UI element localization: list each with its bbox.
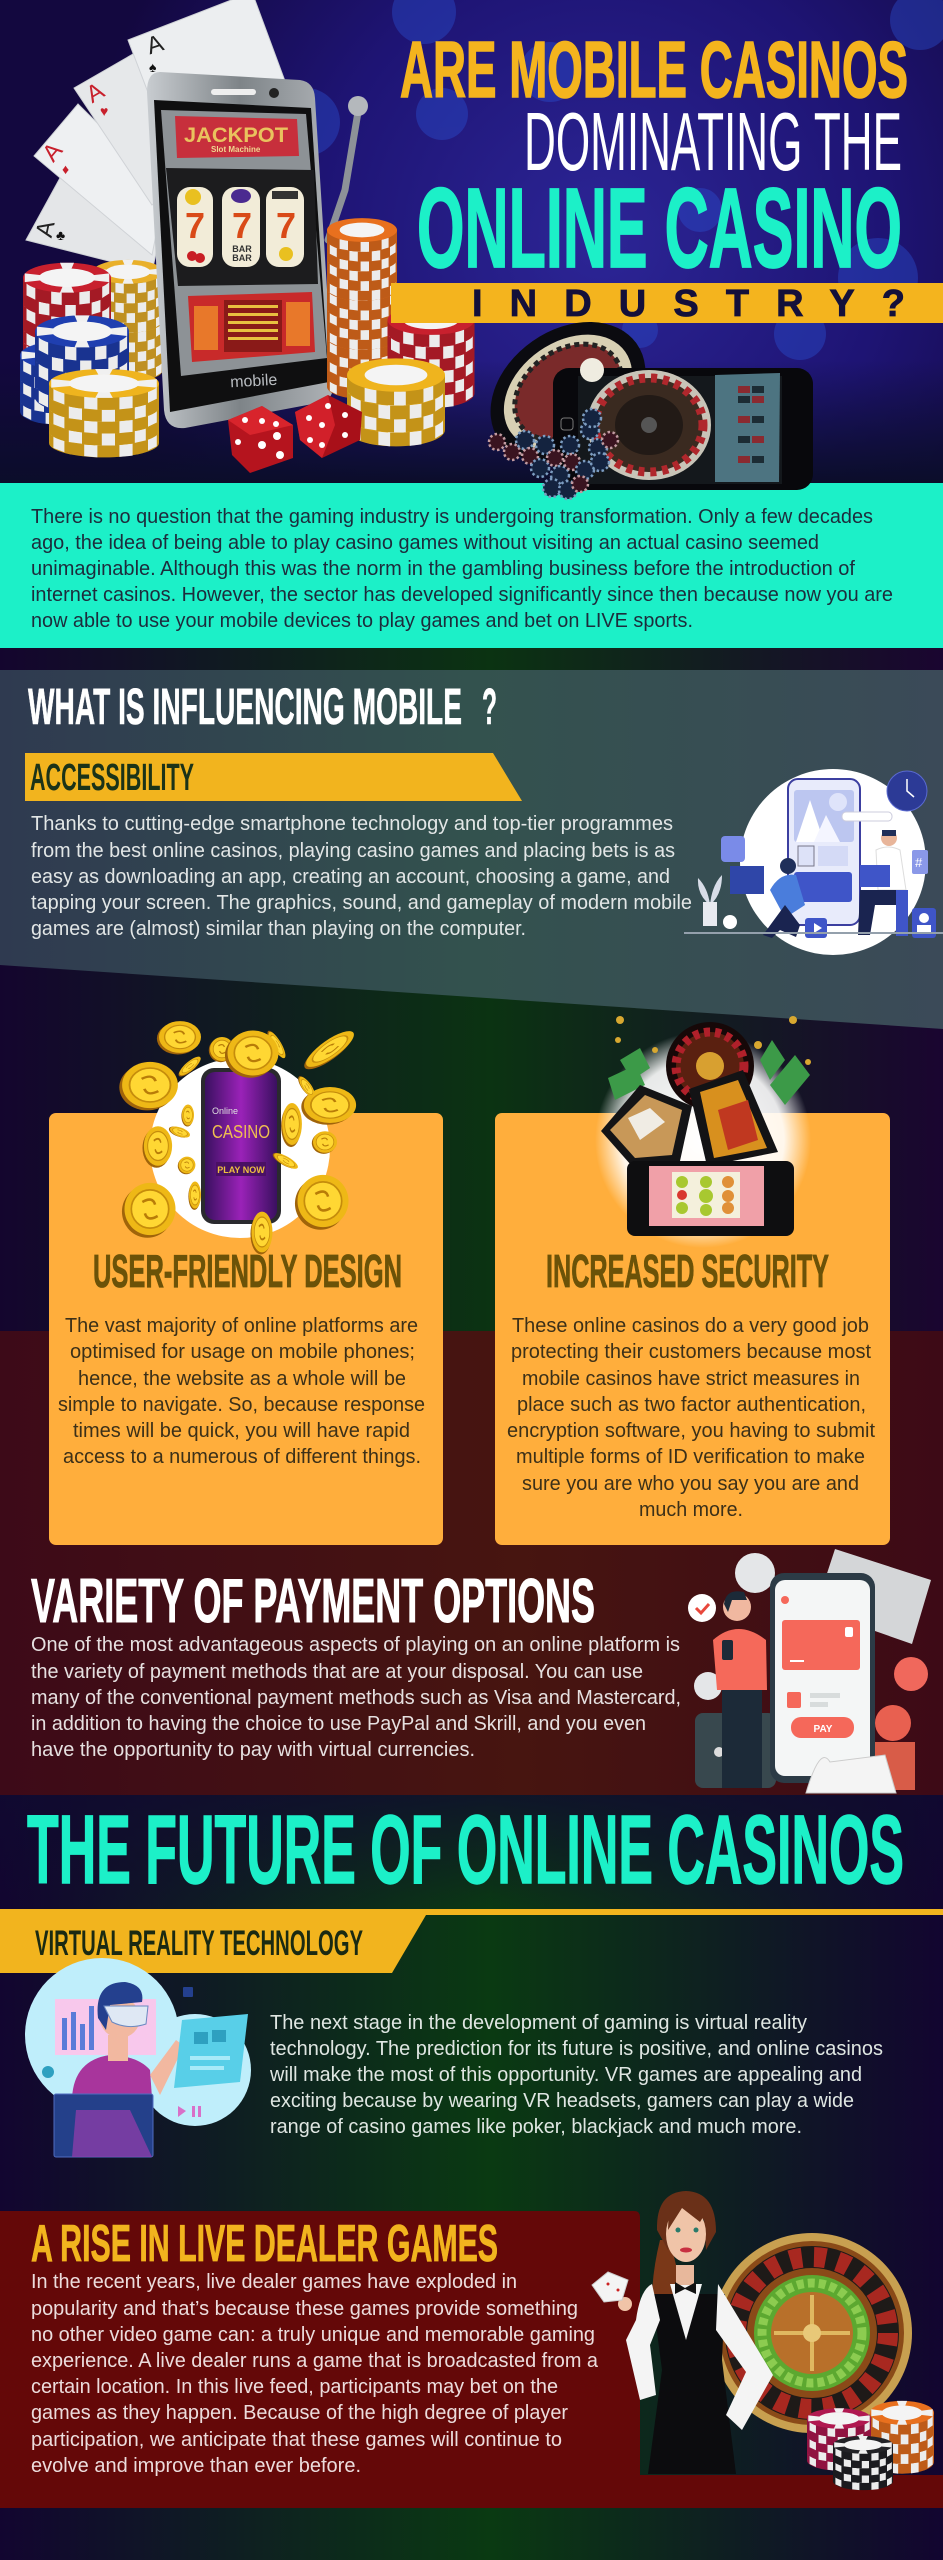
text block: live dealer: certain location. In this live feed, participants may bet on the [31, 2376, 558, 2398]
heading: user-friendly design: USER-FRIENDLY DESIGN [93, 1245, 402, 1297]
text block: payment options: have the opportunity to pay with virtual currencies. [31, 1739, 475, 1761]
icon: playing cards fan: A [37, 137, 68, 167]
icon: slot machine phone: Slot Machine [211, 145, 261, 154]
person [688, 1591, 767, 1788]
section: variety of payment options [31, 1549, 931, 1793]
icon: playing cards fan: ♣ [56, 227, 65, 243]
panel: a rise in live dealer games [0, 2211, 943, 2508]
ribbon: virtual reality technology [0, 1909, 943, 1973]
text block: virtual reality [269, 2012, 883, 2138]
panel: maroon band [0, 1331, 943, 1795]
icon: chip stacks behind the phone [23, 260, 163, 416]
text block: user-friendly design: hence, the website as a whole will be [78, 1368, 406, 1390]
icon: playing cards fan: A [31, 218, 61, 240]
text block: user-friendly design: access to a numerous of different things. [63, 1446, 421, 1468]
text block: virtual reality: exciting because by wearing VR headsets, gamers can play a wide [270, 2090, 854, 2112]
text block: increased security: protecting their customers because most [511, 1341, 871, 1363]
text block: virtual reality: technology. The prediction for its future is positive, and online casinos [270, 2038, 883, 2060]
text block: intro: now able to use your mobile devices to play games and bet on LIVE sports. [31, 610, 693, 632]
text block: accessibility: easy as downloading an app, creating an account, choosing a game, and [31, 866, 670, 888]
text block: intro: unimaginable. Although this was the norm in the gambling business before the introduction of [31, 558, 855, 580]
person right [858, 830, 908, 936]
icon: slot machine phone: 7 [185, 205, 205, 246]
text block: virtual reality: The next stage in the development of gaming is virtual reality [270, 2012, 807, 2034]
icon: slot machine phone: BAR [232, 244, 252, 254]
heading: what is influencing mobile [28, 678, 497, 735]
icon: playing cards fan: A [143, 30, 167, 60]
text block: increased security: These online casinos do a very good job [512, 1315, 869, 1337]
text block: accessibility [31, 813, 692, 940]
icon: app developers illustration: # [915, 855, 923, 870]
plant [698, 875, 737, 929]
panel: what is influencing mobile: ? [482, 678, 497, 735]
text block: user-friendly design: The vast majority of online platforms are [65, 1315, 418, 1337]
icon: casino phone with coins: Online [212, 1106, 238, 1116]
icon: playing cards fan: ♥ [100, 103, 108, 119]
text block: live dealer: games as they happen. Because of the high degree of player [31, 2402, 568, 2424]
ribbon: virtual reality technology: VIRTUAL REALITY TECHNOLOGY [35, 1924, 363, 1963]
icon: dealer chips [807, 2401, 934, 2490]
text block: intro [31, 506, 893, 632]
panel: what is influencing mobile [0, 670, 943, 1029]
text block: live dealer: participation, we anticipate that these games will continue to [31, 2429, 562, 2451]
text block: increased security: sure you are who you say you are and [522, 1473, 859, 1495]
text block: intro: internet casinos. However, the sector has developed significantly since then because now you are [31, 584, 893, 606]
icon: slot machine phone: mobile [230, 372, 278, 391]
text block: user-friendly design [58, 1315, 425, 1468]
text block: virtual reality: range of casino games like poker, blackjack and much more. [270, 2116, 802, 2138]
icon: casino phones and roulette [595, 1016, 811, 1248]
text block: intro: ago, the idea of being able to play casino games without visiting an actual casino seemed [31, 532, 819, 554]
person left [763, 858, 805, 938]
text block: increased security: place such as two factor authentication, [517, 1394, 866, 1416]
text block: live dealer: In the recent years, live dealer games have exploded in [31, 2271, 517, 2293]
icon: red dice [228, 395, 362, 473]
heading: what is influencing mobile: WHAT IS INFLUENCING MOBILE [28, 678, 462, 735]
icon: playing cards fan: ♠ [149, 59, 157, 75]
icon: roulette wheel and phone [464, 293, 813, 499]
hero banner [0, 0, 943, 483]
text block: live dealer: no other video game can: a truly unique and memorable gaming [31, 2324, 595, 2346]
icon: slot machine phone: BAR [232, 253, 252, 263]
icon: mobile payment illustration: PAY [814, 1724, 833, 1735]
text block: payment options [31, 1634, 681, 1761]
icon: slot machine phone: JACKPOT [184, 124, 288, 147]
text block: virtual reality: will make the most of this opportunity. VR games are appealing and [269, 2064, 862, 2086]
icon: app developers illustration [684, 769, 943, 955]
text block: increased security: mobile casinos have strict measures in [522, 1368, 860, 1390]
text block: user-friendly design: optimised for usage on mobile phones; [70, 1341, 415, 1363]
icon: playing cards fan: ♦ [62, 161, 69, 177]
text block: live dealer [31, 2271, 599, 2477]
text block: live dealer: evolve and improve than ever before. [31, 2455, 361, 2477]
icon: VR person illustration [25, 1958, 251, 2157]
text block: accessibility: games are (almost) similar than playing on the computer. [31, 918, 526, 940]
text block: increased security [507, 1315, 875, 1521]
icon: casino phone with coins: PLAY NOW [217, 1165, 265, 1175]
icon: roulette wheel [712, 2233, 912, 2433]
icon: casino phone with coins: CASINO [212, 1122, 270, 1142]
icon: casino phone with coins [119, 1021, 359, 1254]
card: increased security [495, 1016, 890, 1545]
text block: live dealer: experience. A live dealer runs a game that is broadcasted from a [31, 2350, 599, 2372]
text block: increased security: multiple forms of ID verification to make [516, 1446, 865, 1468]
title [391, 25, 943, 325]
icon: slot machine phone: 7 [276, 205, 296, 246]
text block: increased security: encryption software, you having to submit [507, 1420, 875, 1442]
card: user-friendly design [49, 1021, 443, 1545]
text block: live dealer: popularity and that’s because these games provide something [31, 2298, 578, 2320]
icon: lever of slot machine [328, 96, 368, 240]
text block: accessibility: tapping your screen. The graphics, sound, and gameplay of modern mobile [31, 892, 692, 914]
text block: user-friendly design: times will be quick, you will have rapid [73, 1420, 410, 1442]
ribbon: accessibility [25, 753, 522, 801]
text block: user-friendly design: simple to navigate. So, because response [58, 1394, 425, 1416]
page background: upper dark strip [0, 648, 943, 1338]
icon: playing cards fan: A [82, 77, 109, 109]
icon: playing cards fan [26, 0, 292, 272]
text block: intro: There is no question that the gaming industry is undergoing transformation. Only a few decades [31, 506, 873, 528]
ribbon: accessibility: ACCESSIBILITY [30, 757, 194, 799]
icon: chip stacks right and front [20, 218, 474, 457]
text block: payment options: the variety of payment methods that are at your disposal. You can use [31, 1661, 643, 1683]
text block: accessibility: from the best online casinos, playing casino games and placing bets is as [31, 840, 675, 862]
text block: accessibility: Thanks to cutting-edge smartphone technology and top-tier programmes [31, 813, 673, 835]
section: future of online casinos background [0, 1795, 943, 2560]
icon: small chips pile [489, 409, 618, 499]
text block: increased security: much more. [639, 1499, 743, 1521]
icon: slot machine phone: 7 [232, 205, 252, 246]
icon: mobile payment illustration [688, 1549, 931, 1793]
text block: payment options: many of the conventional payment methods such as Visa and Mastercard, [31, 1687, 681, 1709]
panel: intro band [0, 483, 943, 648]
heading: a rise in live dealer games: A RISE IN LIVE DEALER GAMES [31, 2215, 498, 2273]
title banner: industry: INDUSTRY? [472, 283, 905, 325]
text block: payment options: in addition to having the choice to use PayPal and Skrill, and you even [31, 1713, 646, 1735]
icon: casino dealer woman [592, 2191, 773, 2474]
text block: payment options: One of the most advantageous aspects of playing on an online platform is [31, 1634, 680, 1656]
icon: slot machine phone [147, 72, 333, 428]
